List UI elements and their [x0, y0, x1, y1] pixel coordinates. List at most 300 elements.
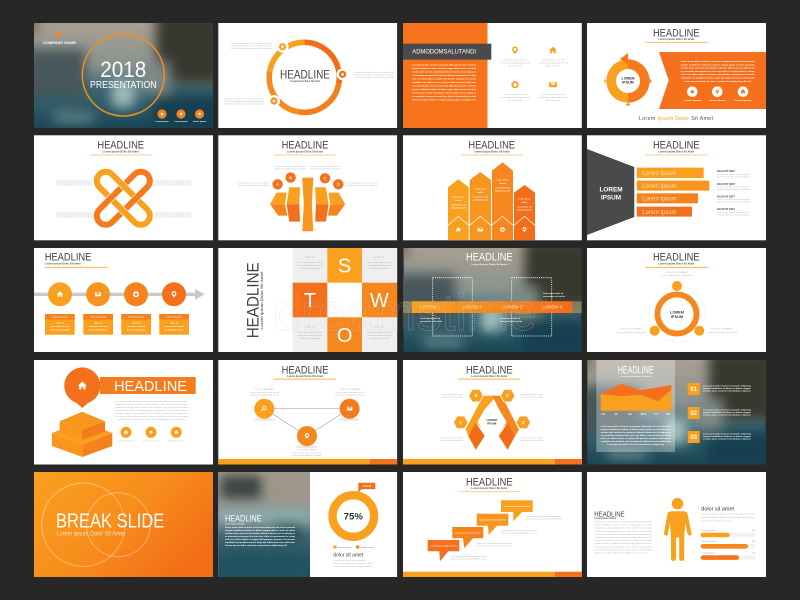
- paragraph: cupidatat non proident sunt in culpa qui officia deserunt mollit: [594, 536, 652, 539]
- captions: Lorem ipsum dolor sit amet elit: [662, 274, 692, 277]
- subtitle: Lorem Ipsum Dolor Sit Amet: [45, 262, 81, 266]
- chart axis labels: 6.8: [666, 412, 670, 416]
- three orange bullets with labels: Lorem ipsum: [156, 120, 169, 123]
- column text: consectetur elit: [495, 186, 510, 189]
- captions: consectetur adipiscing sed do: [336, 394, 365, 396]
- panel paragraph: Lorem ipsum dolor sit amet, consectetur adipiscing elit sed do eiusmod: [601, 425, 671, 428]
- captions: consectetur elit sed do: [441, 396, 464, 398]
- progress bars: 40%: [752, 530, 756, 532]
- overlapping circles: [42, 483, 150, 566]
- captions: Lorem ipsum dolor sit amet: [441, 393, 463, 396]
- icon: home: [549, 47, 557, 53]
- column text: consectetur elit: [517, 205, 532, 208]
- grey cell text: Lorem ipsum dolor sit amet: [298, 331, 323, 334]
- progress bars: Lorem ipsum: [701, 552, 716, 554]
- SWOT letters: T: [304, 290, 316, 312]
- four captions: do eiusmod: [508, 100, 523, 102]
- captions: DOLOR SIT AMET: [297, 448, 318, 452]
- SWOT letters: S: [338, 256, 351, 278]
- three white icon circles with captions: Lorem ipsum: [709, 99, 726, 102]
- four arrow columns: [448, 162, 535, 240]
- grey cell text: dolor sit: [375, 256, 384, 258]
- bottom left text: Sed do eiusmod tempor incididunt ut labore: [224, 100, 265, 103]
- slide background: [218, 23, 397, 128]
- donut caption: Ut enim ad minim veniam quis nostrud: [333, 565, 372, 568]
- gradient background: [34, 472, 213, 577]
- captions: Sed do eiusmod tempor incididunt: [310, 167, 340, 170]
- headline: HEADLINE: [282, 364, 328, 376]
- grey cell text: sed do eiusmod: [369, 268, 390, 270]
- headline: HEADLINE: [225, 513, 262, 523]
- progress bars: Lorem ipsum: [701, 529, 716, 532]
- grey cell text: consectetur adipiscing elit: [367, 334, 392, 337]
- panel paragraph: cupidatat non proident sunt in culpa qui officia deserunt mollit anim: [681, 76, 755, 80]
- lettered circles A to D: D: [337, 183, 340, 187]
- grey cell text: consectetur adipiscing elit: [298, 334, 323, 337]
- four captions: Lorem ipsum dolor sit amet: [503, 58, 527, 62]
- side title: dolor sit amet: [701, 506, 735, 512]
- orange chevron panel: [659, 52, 766, 109]
- text lower left: [56, 211, 93, 218]
- panel paragraph: Lorem ipsum dolor sit amet consectetur adipiscing: [607, 443, 665, 446]
- bottom bar: [403, 572, 582, 577]
- four captions: Lorem ipsum dolor sit amet: [541, 58, 565, 62]
- paragraph: ea commodo consequat duis aute irure dolor in reprehenderit: [594, 530, 652, 533]
- slide background: [403, 135, 582, 240]
- panel paragraph: Lorem ipsum dolor sit amet, consectetur adipiscing elit sed do eiusmod: [681, 60, 755, 63]
- paragraph: tempor incididunt ut labore et dolore magna aliqua ut enim ad: [594, 542, 653, 545]
- three white icon circles with captions: [684, 86, 752, 102]
- captions: consectetur elit sed do: [441, 439, 464, 442]
- progress bars: Lorem ipsum: [701, 540, 716, 543]
- underline: [458, 490, 521, 493]
- slide 20: person and progress bars: [587, 472, 766, 577]
- left fan columns: [270, 187, 300, 222]
- column text: Lorem ipsum: [452, 195, 464, 198]
- panel paragraph: tempor incididunt ut labore et dolore magna aliqua ut enim ad minim: [681, 63, 755, 66]
- captions: Lorem ipsum dolor sit amet consectetur: [310, 165, 340, 168]
- orange ring: [658, 294, 696, 334]
- right column captions: Sed do eiusmod tempor incididunt: [717, 201, 750, 204]
- numbered badges: [688, 383, 700, 443]
- underline: [645, 266, 708, 269]
- slide background: [587, 23, 766, 128]
- badge text: [703, 384, 752, 440]
- four captions: do eiusmod: [546, 66, 561, 68]
- headline: HEADLINE: [653, 252, 700, 264]
- subtitle: Lorem Ipsum Dolor Sit Amet: [287, 375, 323, 378]
- slide background: [403, 360, 582, 464]
- bottom bar: [218, 459, 397, 464]
- lettered circles A to D: C: [324, 177, 327, 181]
- subtitle: Lorem Ipsum Dolor: [594, 517, 616, 520]
- banner headline: HEADLINE: [114, 378, 187, 395]
- paragraph on orange panel: velit esse cillum dolore eu fugiat nulla pariatur excepteur sint occaec: [412, 78, 477, 80]
- photo captions: consectetur elit sed do: [500, 320, 523, 323]
- timeline boxes: dolor sit: [94, 322, 102, 324]
- three icon circles with captions: Lorem ipsum: [118, 440, 135, 442]
- subtitle: Lorem Ipsum Dolor Sit Amet: [57, 532, 125, 538]
- timeline boxes: consectetur elit sed: [50, 325, 70, 328]
- headline: HEADLINE: [653, 27, 700, 39]
- subtitle: Lorem Ipsum Dolor Sit Amet: [621, 375, 651, 378]
- headline: HEADLINE: [468, 140, 515, 152]
- column text: [451, 178, 533, 211]
- timeline boxes: do eiusmod tempor: [89, 328, 108, 332]
- subtitle: Lorem Ipsum Dolor Sit Amet: [471, 263, 508, 266]
- slide background: [218, 472, 397, 577]
- segmented ring: [269, 42, 339, 112]
- underline: [461, 154, 523, 156]
- three orange bullets with labels: Lorem ipsum: [193, 120, 206, 123]
- panel paragraph: veniam quis nostrud exercitation ullamco laboris nisi ut aliquip ex: [601, 431, 672, 434]
- ring label line two: IPSUM: [671, 315, 683, 319]
- captions: Lorem ipsum dolor sit amet consectetur elit: [476, 542, 512, 545]
- chart axis labels: 10: [615, 412, 618, 416]
- paragraph: duis aute irure dolor in reprehenderit in voluptate velit esse cillum dolore: [115, 409, 189, 412]
- timeline boxes: Lorem ipsum: [52, 316, 68, 319]
- slide background: [34, 135, 213, 240]
- badge text: veniam quis nostrud exercitation ullamco: [703, 390, 752, 392]
- captions: consectetur adipiscing sed do: [292, 454, 322, 457]
- slide 17: break slide: [34, 472, 213, 577]
- captions: Lorem ipsum dolor sit amet: [520, 393, 543, 396]
- three icon circles with captions: Lorem ipsum: [142, 440, 160, 442]
- subtitle: Lorem Ipsum Dolor Sit Amet: [658, 150, 695, 153]
- paragraph on orange panel: veniam quis nostrud exercitation ullamco laboris nisi ut aliquip ex: [412, 70, 477, 74]
- chart axis labels: [601, 412, 670, 416]
- text upper right: Ut enim ad minim veniam quis nostrud: [156, 183, 193, 186]
- side paragraph: [701, 512, 756, 522]
- text upper left: Sed do eiusmod tempor incididunt ut labore: [56, 181, 92, 184]
- cycle ring: [604, 53, 652, 106]
- timeline boxes: do eiusmod tempor: [165, 328, 184, 332]
- lettered hexagons: [453, 389, 531, 429]
- captions: DOLOR SIT AMET: [620, 328, 643, 330]
- column text: adipiscing sed: [451, 207, 467, 209]
- side paragraph: Lorem ipsum dolor sit amet, consectetur adipiscing elit sed: [701, 512, 756, 516]
- timeline boxes: [45, 314, 189, 335]
- SWOT cells: [293, 248, 397, 352]
- slide 15: hexagon arch: [403, 360, 582, 464]
- photo captions: Lorem ipsum dolor sit: [500, 317, 520, 320]
- ring label line two: IPSUM: [622, 81, 634, 85]
- donut caption: Sed do eiusmod tempor incididunt ut labore: [333, 562, 374, 565]
- captions: Lorem ipsum dolor sit amet consectetur elit: [526, 515, 562, 518]
- right column captions: Lorem ipsum dolor sit amet consectetur: [717, 173, 750, 176]
- slide 16: photo with area chart: [577, 350, 779, 471]
- bottom tagline: Lorem Ipsum Dolor Sit Amet: [639, 116, 714, 122]
- right column captions: DOLOR SIT AMET: [717, 208, 736, 211]
- timeline boxes: Lorem ipsum: [128, 316, 144, 319]
- grey cell text: dolor sit: [306, 326, 315, 328]
- lettered circles A to D: B: [289, 176, 292, 180]
- four captions: consectetur adipiscing elit sed: [538, 96, 569, 99]
- text upper right: Lorem ipsum dolor sit amet consectetur elit: [156, 179, 192, 182]
- top left text: Ut enim ad minim veniam quis nostrud: [231, 47, 272, 50]
- subtitle: Lorem Ipsum Dolor Sit Amet: [287, 150, 323, 153]
- top left text: Sed do eiusmod tempor incididunt ut labore: [231, 44, 272, 48]
- timeline nodes: [48, 282, 186, 306]
- four horizontal bars with labels: Lorem Ipsum: [642, 197, 676, 203]
- paragraph: cupidatat non proident sunt in culpa qui officia deserunt mollit anim: [225, 541, 295, 544]
- year tag: YEAR: [363, 484, 372, 488]
- right text: Sed do eiusmod tempor incididunt ut labore: [354, 74, 394, 76]
- captions: consectetur elit sed do: [520, 439, 544, 442]
- slide 8: funnel and bars: [587, 135, 766, 240]
- underline: [645, 154, 708, 156]
- text upper right: Sed do eiusmod tempor incididunt ut labore: [156, 181, 192, 184]
- paragraph: Lorem ipsum dolor sit amet, consectetur adipiscing elit sed do: [594, 539, 653, 542]
- paragraph: veniam quis nostrud exercitation ullamco laboris nisi ut aliquip: [594, 527, 653, 530]
- chart axis labels: 8.1: [628, 412, 632, 416]
- headline: HEADLINE: [466, 364, 513, 376]
- right column captions: Lorem ipsum dolor sit amet consectetur: [717, 186, 750, 189]
- stepped pyramid: [52, 412, 112, 457]
- timeline boxes: dolor sit: [132, 322, 140, 324]
- underline: [45, 266, 108, 269]
- text lower right: Sed do eiusmod tempor incididunt ut labore: [156, 213, 192, 216]
- timeline boxes: consectetur elit sed: [165, 325, 184, 328]
- slide 2: ring headline: [218, 23, 397, 128]
- column text: adipiscing sed: [517, 209, 533, 211]
- timeline boxes: consectetur elit sed: [89, 325, 108, 328]
- icon: person: [666, 498, 690, 561]
- right column captions: [717, 170, 750, 216]
- grey cell text: sed do eiusmod: [300, 268, 321, 270]
- dolor sit amet title: dolor sit amet: [333, 553, 364, 559]
- legend: [333, 546, 374, 549]
- chart axis labels: 1.6: [601, 412, 605, 416]
- bubble labels: Lorem ipsum dolor sit amet: [504, 505, 530, 508]
- captions: Lorem ipsum dolor sit amet elit: [250, 391, 280, 394]
- orange gradient band: [412, 301, 572, 313]
- panel paragraph: tempor incididunt ut labore et dolore magna aliqua ut enim ad minim: [601, 428, 671, 431]
- panel paragraph: Lorem ipsum dolor sit amet, consectetur adipiscing elit sed: [684, 80, 752, 83]
- speech bubbles: [428, 500, 533, 561]
- paragraph: Lorem ipsum dolor sit amet, consectetur adipiscing elit sed do eiusmod: [225, 526, 296, 529]
- text lower right: Lorem ipsum dolor sit amet consectetur elit: [156, 211, 192, 214]
- column text: adipiscing sed: [495, 190, 511, 192]
- four captions: do eiusmod: [508, 66, 523, 68]
- paragraph: Lorem ipsum dolor sit amet, consectetur adipiscing elit sed do: [594, 520, 653, 524]
- grey cell text: consectetur adipiscing elit: [298, 264, 323, 267]
- three white icon circles with captions: Lorem ipsum: [684, 99, 701, 102]
- paragraph: nostrud exercitation ullamco laboris nisi ut aliquip ex ea commodo consequat: [115, 406, 188, 409]
- right text: Lorem ipsum dolor sit amet consectetur elit: [354, 71, 394, 74]
- column text: dolor: [522, 201, 528, 204]
- captions: Sed do eiusmod tempor incididunt ut labore: [526, 518, 562, 520]
- headline: HEADLINE: [97, 140, 144, 152]
- paragraph on orange panel: [412, 64, 477, 102]
- progress bars: 70%: [752, 552, 756, 554]
- badge text: tempor incididunt ut labore et dolore magna: [703, 435, 752, 438]
- slide 13: pyramid with banner: [34, 360, 213, 464]
- headline: HEADLINE: [466, 252, 513, 264]
- badge text: Lorem ipsum dolor sit amet, consectetur adipiscing: [703, 384, 751, 388]
- donut caption: Lorem ipsum dolor sit amet consectetur: [333, 559, 367, 562]
- year: 2018: [100, 57, 146, 82]
- headline: HEADLINE: [466, 476, 513, 488]
- side paragraph: tempor incididunt ut labore et dolore magna aliqua ut enim: [701, 516, 756, 519]
- slide background: [403, 472, 582, 577]
- slide background: [34, 248, 213, 352]
- area chart: [601, 384, 671, 411]
- lettered circles A to D: A: [276, 183, 279, 187]
- panel paragraph: ea commodo consequat duis aute irure dolor in reprehenderit in volupt: [601, 434, 671, 437]
- donut chart: [332, 495, 374, 537]
- right column captions: Sed do eiusmod tempor incididunt: [717, 213, 750, 216]
- dashed frames: [433, 278, 552, 336]
- text lower right: [156, 211, 193, 218]
- ring label: LOREM: [670, 310, 684, 314]
- icon: mail: [549, 82, 557, 87]
- slide 3: orange side panel with four icons: [403, 23, 582, 128]
- paragraph: ea commodo consequat duis aute irure dolor in reprehenderit in volupt: [225, 535, 295, 538]
- column text: consectetur elit: [473, 195, 488, 198]
- slide 18: photo and donut: [213, 462, 397, 584]
- captions: Sed do eiusmod tempor incididunt ut labore: [476, 544, 513, 548]
- bottom left text: Ut enim ad minim veniam quis nostrud: [224, 102, 265, 106]
- headline: HEADLINE: [282, 140, 328, 152]
- paragraph: velit esse cillum dolore eu fugiat nulla pariatur excepteur sint occaec: [225, 538, 296, 541]
- three nodes: [650, 281, 704, 336]
- subtitle: Lorem Ipsum Dolor Sit Amet: [658, 262, 695, 266]
- panel paragraph: velit esse cillum dolore eu fugiat nulla pariatur excepteur sint occaec: [681, 73, 756, 76]
- timeline boxes: do eiusmod tempor: [50, 328, 70, 332]
- translucent panel: [596, 360, 675, 452]
- orange circle frame: [82, 34, 164, 116]
- slide 14: triangle network: [218, 360, 397, 464]
- badge text: tempor incididunt ut labore et dolore magna: [703, 411, 752, 414]
- orange panel: [403, 23, 488, 128]
- hexagon letters: A: [459, 420, 462, 425]
- numbered badges: 01: [690, 387, 698, 393]
- photo captions: consectetur elit sed do: [543, 295, 566, 298]
- top left text: Lorem ipsum dolor sit amet consectetur elit: [231, 42, 272, 45]
- slide background: [587, 135, 766, 240]
- underline: [645, 41, 708, 44]
- column text: dolor: [455, 199, 462, 202]
- slide 12: triple node ring: [587, 248, 766, 352]
- right column captions: Lorem ipsum dolor sit amet consectetur: [717, 211, 750, 214]
- band labels: LOREM 4: [542, 305, 563, 310]
- right column captions: DOLOR SIT AMET: [717, 183, 736, 186]
- subtitle: Lorem Ipsum Dolor: [225, 522, 245, 526]
- slide background: [218, 248, 397, 352]
- paragraph: ea commodo consequat duis aute irure dolor in reprehenderit: [594, 548, 652, 551]
- panel paragraph: ea commodo consequat duis aute irure dolor in reprehenderit in volupt: [681, 70, 755, 73]
- paragraph: [225, 526, 296, 547]
- slide 4: ring and orange chevron panel: [587, 23, 766, 128]
- paragraph: Lorem ipsum dolor sit amet, consectetur adipiscing elit sed do eiusmod tempor: [115, 400, 188, 403]
- photo captions: Lorem ipsum dolor sit: [543, 292, 563, 295]
- paragraph on orange panel: tempor incididunt ut labore et dolore magna aliqua ut enim ad minim: [412, 88, 476, 91]
- progress bars: [701, 529, 756, 560]
- column text: dolor: [500, 182, 506, 185]
- vertical headline: HEADLINE: [243, 262, 262, 338]
- captions: DOLOR SIT AMET: [666, 271, 689, 274]
- text upper left: [56, 179, 93, 186]
- paragraph on orange panel: tempor incididunt ut labore et dolore magna aliqua ut enim ad minim: [412, 67, 476, 70]
- three icon circles with captions: [118, 427, 185, 442]
- captions: Lorem ipsum dolor sit amet consectetur: [275, 165, 306, 168]
- chart axis labels: 7.1: [654, 412, 658, 416]
- pale outer circle: [649, 286, 705, 342]
- centre column: [302, 178, 313, 231]
- numbered badges: 03: [690, 435, 698, 441]
- slide 5: interlocked knot: [34, 135, 213, 240]
- captions: Sed do eiusmod tempor incididunt: [275, 167, 306, 170]
- arch diamonds: [468, 423, 515, 450]
- four horizontal bars with labels: Lorem Ipsum: [642, 184, 676, 190]
- paragraph: [115, 400, 189, 421]
- captions: DOLOR SIT AMET: [711, 328, 734, 330]
- hexagon letters: C: [506, 393, 509, 398]
- captions: Sed do eiusmod tempor incididunt: [347, 184, 378, 187]
- photo captions: consectetur elit sed do: [420, 320, 443, 323]
- hexagon letters: [459, 393, 525, 425]
- slide 10: SWOT grid: [218, 248, 397, 352]
- paragraph on orange panel: ea commodo consequat duis aute irure dolor in reprehenderit in volupt: [412, 95, 476, 98]
- bubble labels: Lorem ipsum dolor sit amet: [480, 518, 506, 522]
- interlocked stadium knot: [93, 168, 154, 229]
- band title: ADMODOMSALUTANDI: [412, 49, 476, 56]
- bottom left text: [224, 98, 265, 106]
- timeline boxes: Lorem ipsum: [166, 316, 182, 319]
- band labels: [420, 305, 563, 310]
- hexagon letters: D: [522, 420, 525, 425]
- captions: Lorem ipsum dolor sit amet elit: [292, 452, 322, 454]
- panel paragraph: cupidatat non proident sunt in culpa qui officia deserunt mollit anim: [601, 440, 671, 443]
- captions: Lorem ipsum dolor sit amet elit: [616, 331, 646, 334]
- paragraph: in culpa qui officia deserunt mollit anim id est laborum sed ut perspiciatis: [115, 415, 188, 418]
- numbered badges: 02: [690, 411, 698, 417]
- slide 1: cover 2018 presentation: [24, 13, 226, 135]
- blurred city photo background: [587, 360, 766, 464]
- subtitle: Lorem Ipsum Dolor Sit Amet: [471, 487, 508, 490]
- paragraph on orange panel: Lorem ipsum dolor sit amet, consectetur adipiscing elit sed do eiusmod: [412, 64, 477, 66]
- timeline boxes: dolor sit: [56, 322, 64, 324]
- subtitle: Lorem Ipsum Dolor Sit Amet: [474, 150, 510, 153]
- slide background: [587, 472, 766, 577]
- three icon circles with captions: Lorem ipsum: [168, 440, 185, 442]
- four captions: Lorem ipsum dolor sit amet: [503, 93, 527, 96]
- arch left arm: [466, 396, 497, 436]
- slide background: [587, 248, 766, 352]
- vertical subtitle: Lorem Ipsum Dolor Sit Amet: [260, 270, 264, 330]
- captions: Lorem ipsum dolor sit amet elit: [336, 391, 365, 394]
- top left text: [231, 42, 272, 50]
- three white icon circles with captions: Lorem ipsum: [734, 99, 752, 102]
- four captions: consectetur adipiscing elit sed: [500, 62, 531, 64]
- bottom left text: Lorem ipsum dolor sit amet consectetur elit: [224, 98, 265, 100]
- watermark text: dreamstime: [273, 284, 537, 342]
- captions: Lorem ipsum dolor sit amet elit: [707, 331, 737, 334]
- four horizontal bars with labels: [637, 168, 709, 217]
- SWOT letters: [304, 256, 389, 347]
- blurred city photo background: [34, 23, 213, 128]
- four captions: Lorem ipsum dolor sit amet: [541, 93, 565, 96]
- grey cell text: dolor sit: [306, 256, 315, 258]
- right text: [354, 71, 394, 79]
- company name: COMPANY NAME: [43, 40, 76, 45]
- slide background: [34, 360, 213, 464]
- chart axis labels: 40.5: [640, 412, 646, 416]
- captions: [441, 393, 544, 442]
- underline: [458, 378, 520, 380]
- legend: Lorem ipsum: [338, 546, 352, 549]
